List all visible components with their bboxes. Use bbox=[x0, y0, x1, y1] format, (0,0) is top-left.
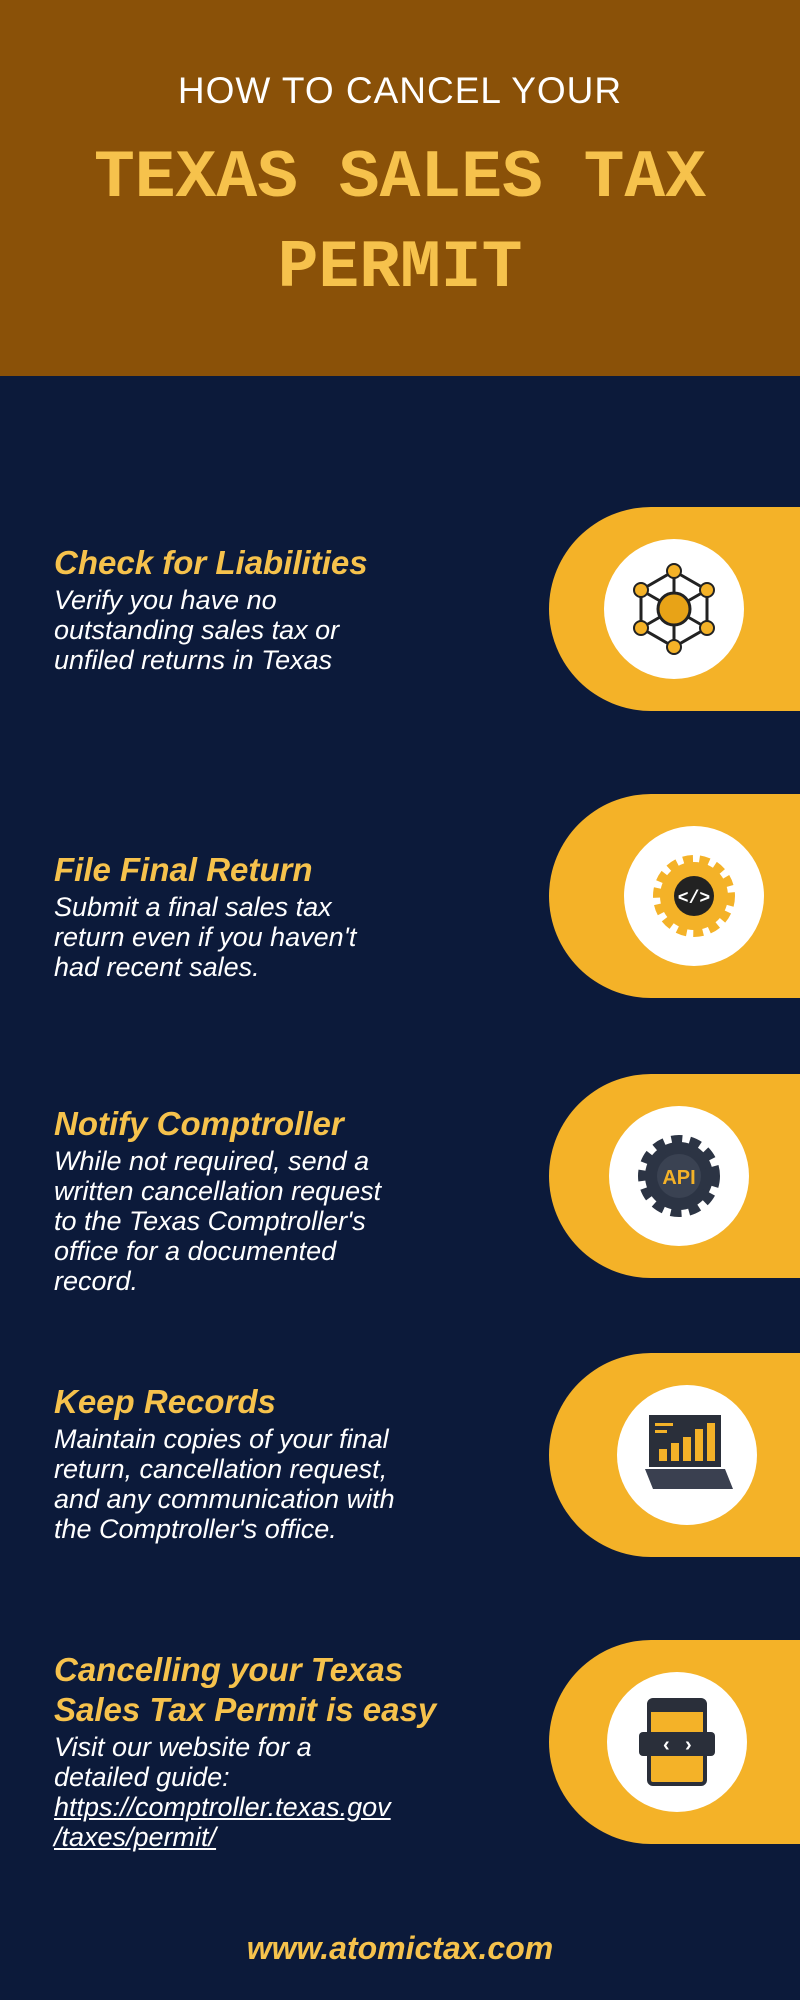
icon: browser slider bbox=[639, 1698, 715, 1786]
step 5 text: Visit our website for a bbox=[54, 1732, 312, 1762]
icon: browser slider: ‹ bbox=[663, 1734, 670, 1756]
icon: laptop chart bbox=[645, 1415, 733, 1489]
step 4 text: Keep Records bbox=[54, 1383, 276, 1420]
step 2 text: return even if you haven't bbox=[54, 922, 356, 952]
step 2 icon pill bbox=[549, 794, 800, 998]
icon: API gear bbox=[638, 1135, 720, 1217]
step 1 text: Check for Liabilities bbox=[54, 544, 368, 581]
step 2 text: Submit a final sales tax bbox=[54, 892, 332, 922]
step 2 text bbox=[54, 851, 358, 982]
footer url: www.atomictax.com bbox=[247, 1930, 553, 1966]
step 5 text: Sales Tax Permit is easy bbox=[54, 1691, 436, 1728]
title bbox=[94, 140, 706, 307]
step 4 text: and any communication with bbox=[54, 1484, 395, 1514]
step 3 text: Notify Comptroller bbox=[54, 1105, 344, 1142]
icon: network bbox=[633, 563, 715, 655]
step 2 text: had recent sales. bbox=[54, 952, 260, 982]
step 5 icon pill bbox=[549, 1640, 800, 1844]
step 1 text: Verify you have no bbox=[54, 585, 277, 615]
step 3 text: While not required, send a bbox=[54, 1146, 369, 1176]
step 3 text: to the Texas Comptroller's bbox=[54, 1206, 366, 1236]
step 2 text: File Final Return bbox=[54, 851, 313, 888]
step 3 text: record. bbox=[54, 1266, 138, 1296]
icon: code gear bbox=[653, 855, 735, 937]
step 5 text: detailed guide: bbox=[54, 1762, 230, 1792]
subtitle: HOW TO CANCEL YOUR bbox=[178, 70, 622, 111]
step 1 icon pill bbox=[549, 507, 800, 711]
step 5 text: https://comptroller.texas.gov bbox=[54, 1792, 391, 1822]
step 4 text: the Comptroller's office. bbox=[54, 1514, 337, 1544]
step 1 text: outstanding sales tax or bbox=[54, 615, 339, 645]
icon: code gear: </> bbox=[678, 889, 710, 909]
step 3 text: office for a documented bbox=[54, 1236, 336, 1266]
icon: API gear: API bbox=[662, 1167, 696, 1189]
step 5 text bbox=[52, 1651, 438, 1852]
step 4 text: Maintain copies of your final bbox=[54, 1424, 389, 1454]
title: PERMIT bbox=[278, 230, 522, 307]
title: TEXAS SALES TAX bbox=[94, 140, 706, 217]
icon: browser slider: › bbox=[685, 1734, 692, 1756]
header bbox=[0, 0, 800, 376]
step 4 text: return, cancellation request, bbox=[54, 1454, 387, 1484]
step 3 text: written cancellation request bbox=[54, 1176, 381, 1206]
step 1 text: unfiled returns in Texas bbox=[54, 645, 332, 675]
step 3 icon pill bbox=[549, 1074, 800, 1278]
step 3 text bbox=[54, 1105, 382, 1296]
step 1 text bbox=[54, 544, 368, 675]
step 5 text: /taxes/permit/ bbox=[54, 1822, 216, 1852]
step 5 text: Cancelling your Texas bbox=[54, 1651, 403, 1688]
step 4 text bbox=[54, 1383, 395, 1544]
step 4 icon pill bbox=[549, 1353, 800, 1557]
